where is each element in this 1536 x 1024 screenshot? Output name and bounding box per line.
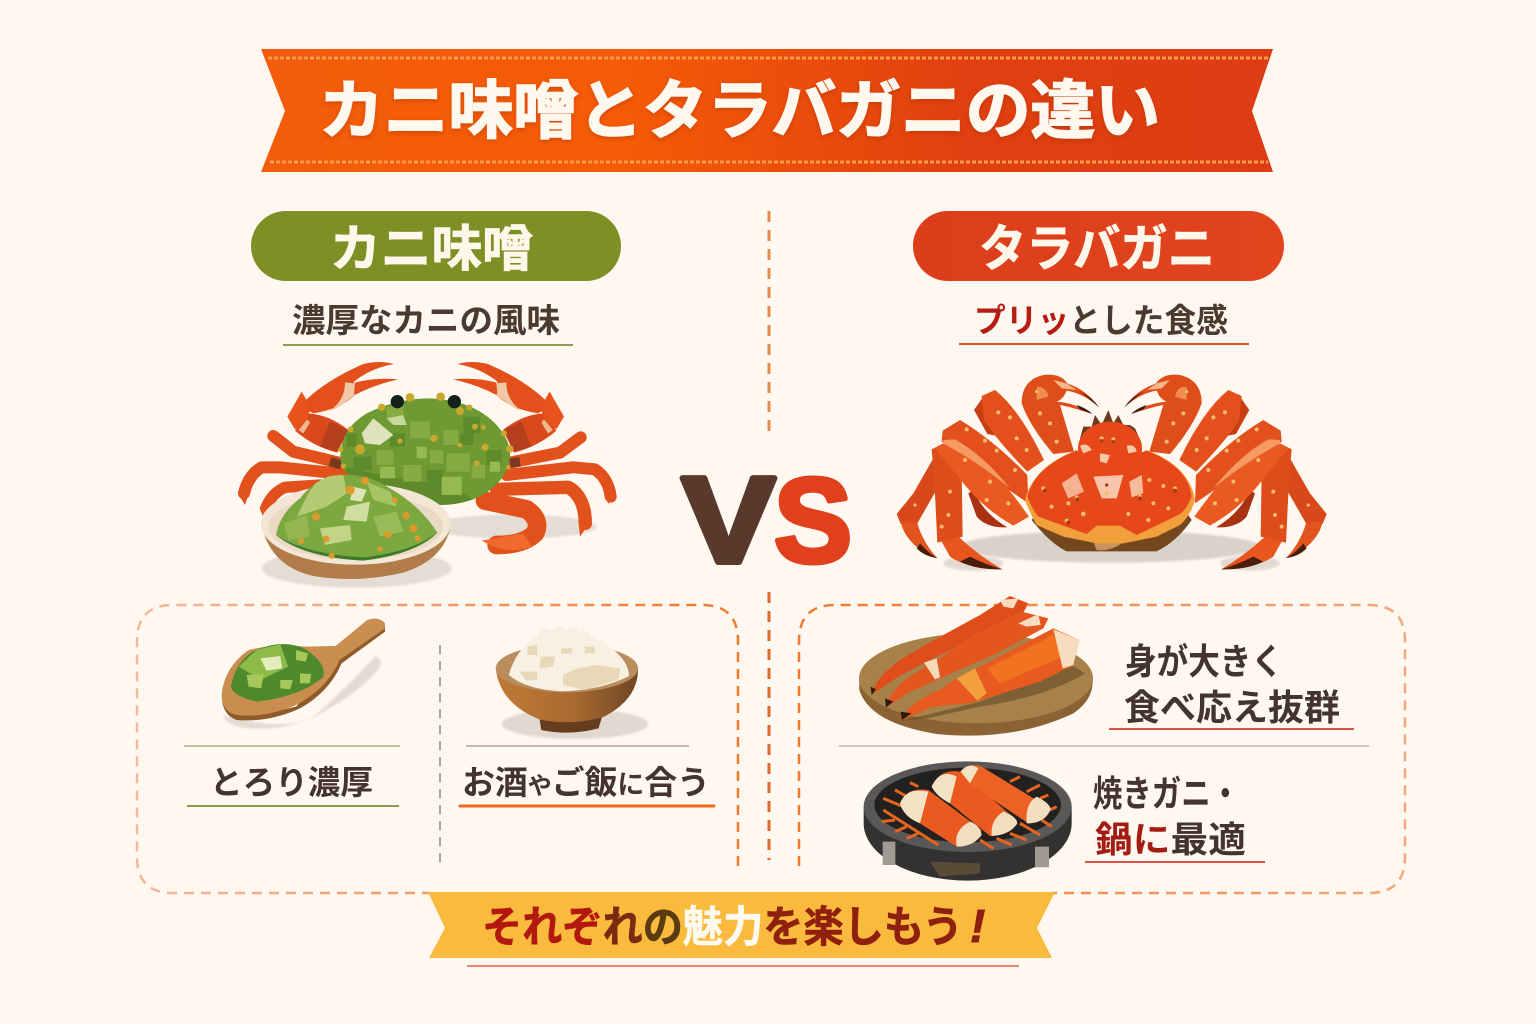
title text: カニ味噌とタラバガニの違い [319, 60, 1160, 152]
label: とろり濃厚: とろり濃厚 [210, 756, 373, 804]
pill: タラバガニ: タラバガニ [979, 209, 1215, 281]
illustration: king crab [897, 375, 1327, 571]
label: お酒やご飯に合う: お酒やご飯に合う [462, 756, 710, 804]
pill: カニ味噌 [251, 209, 621, 281]
title banner [261, 49, 1273, 172]
inner divider [439, 645, 441, 862]
infographic canvas [136, 49, 1406, 967]
subtitle: 濃厚なカニの風味: 濃厚なカニの風味 [292, 294, 560, 342]
label: 焼きガニ・鍋に最適: 鍋に最適 [1095, 811, 1246, 863]
exclamation mark: ! [970, 900, 985, 952]
icon: grill with crab sticks [864, 761, 1072, 881]
crab shell [338, 392, 514, 506]
bottom banner [428, 892, 1055, 966]
label: 身が大きく 食べ応え抜群: 食べ応え抜群 [1124, 679, 1340, 731]
rule under spoon [184, 745, 400, 747]
left claw [287, 362, 398, 453]
center divider top [768, 211, 770, 437]
label: 身が大きく 食べ応え抜群 [1109, 633, 1354, 731]
crab legs [244, 436, 611, 545]
rule between plates [839, 745, 1369, 747]
icon: wooden spoon with crab miso [222, 619, 385, 729]
miso dish [261, 475, 451, 579]
pill: カニ味噌: カニ味噌 [330, 209, 533, 281]
icon: rice bowl [496, 626, 648, 739]
pill: タラバガニ [913, 209, 1284, 281]
crab left half [897, 375, 1099, 569]
subtitle: プリッとした食感: プリッとした食感 [974, 294, 1228, 342]
VS mark [682, 452, 852, 588]
panel: タラバガニ features [799, 596, 1405, 893]
carapace [1025, 410, 1195, 551]
label: 焼きガニ・鍋に最適 [1085, 765, 1265, 863]
banner text: それぞれの魅力を楽しもう [482, 893, 963, 955]
icon: crab legs on wooden plate [859, 596, 1093, 736]
label: 身が大きく 食べ応え抜群: 身が大きく [1125, 633, 1283, 685]
illustration: green miso crab with dish [238, 362, 616, 588]
panel: カニ味噌 features [137, 605, 738, 893]
center divider bottom [768, 592, 770, 860]
banner underline [467, 965, 1019, 967]
VS mark: V [682, 452, 775, 588]
rule under bowl [466, 745, 689, 747]
crab eyes [391, 395, 461, 408]
label: 焼きガニ・鍋に最適: 焼きガニ・ [1093, 765, 1240, 817]
VS mark: S [774, 454, 852, 588]
